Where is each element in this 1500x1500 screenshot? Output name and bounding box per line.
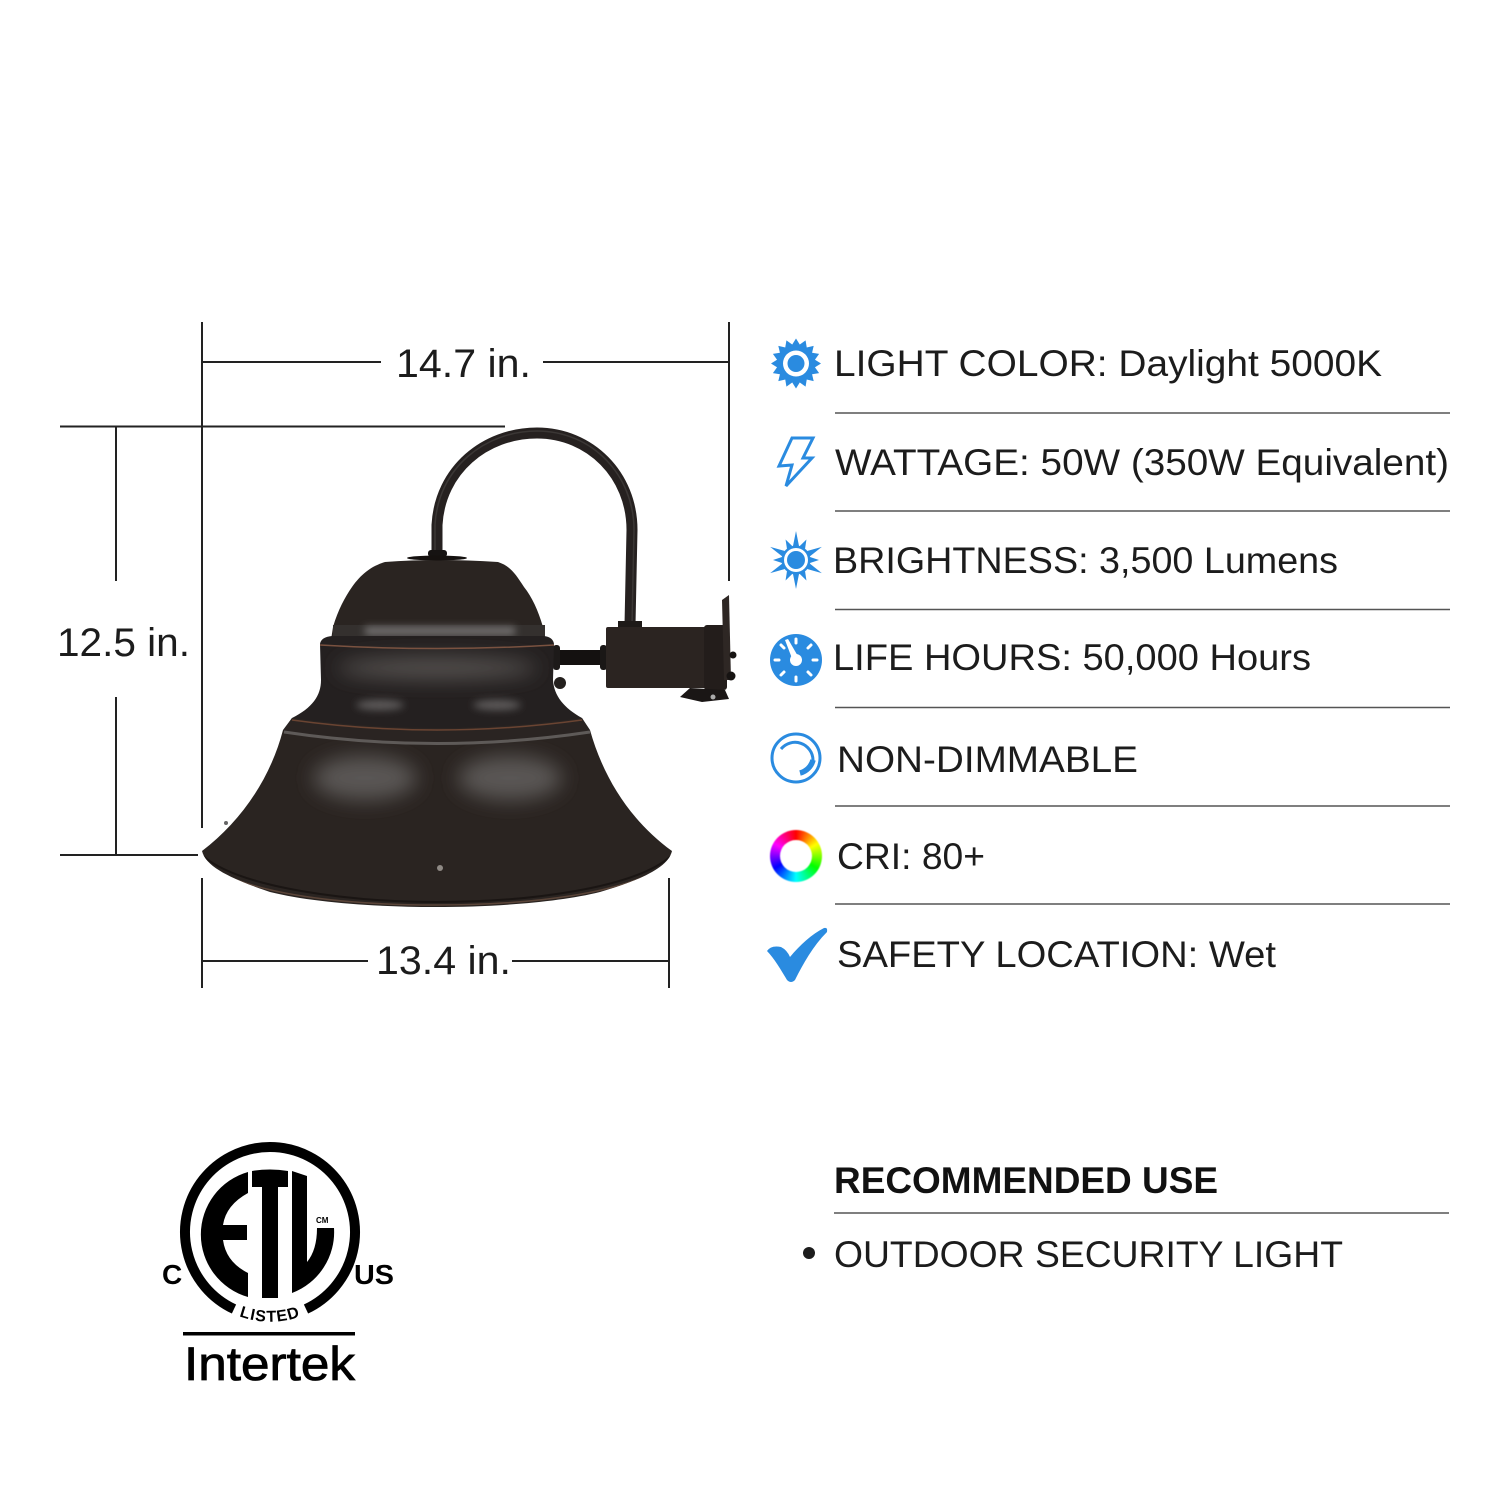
spec: wattage: WATTAGE: 50W (350W Equivalent) bbox=[835, 442, 1449, 483]
letter T bbox=[252, 1170, 288, 1298]
spec: brightness: BRIGHTNESS: 3,500 Lumens bbox=[833, 540, 1338, 581]
logo: ETL listed Intertek bbox=[162, 1142, 394, 1390]
dome bbox=[331, 560, 545, 640]
dividers bbox=[834, 413, 1450, 1213]
dimension lines bbox=[60, 322, 729, 988]
spec: life hours: LIFE HOURS: 50,000 Hours bbox=[833, 637, 1311, 678]
dimension label: height: 12.5 in. bbox=[57, 621, 190, 665]
product: gooseneck outdoor light bbox=[195, 431, 736, 915]
icon: life hours dial bbox=[770, 634, 822, 686]
recommended use item: OUTDOOR SECURITY LIGHT bbox=[834, 1234, 1343, 1275]
icon: lightning bolt bbox=[779, 438, 813, 486]
shade band bbox=[283, 718, 590, 744]
bullet bbox=[803, 1247, 815, 1259]
spec: light color: LIGHT COLOR: Daylight 5000K bbox=[834, 343, 1382, 384]
icon: light color sun bbox=[771, 338, 821, 389]
spec: non-dimmable: NON-DIMMABLE bbox=[837, 739, 1138, 780]
LISTED arc text: LISTED bbox=[240, 1306, 298, 1322]
ring bbox=[185, 1147, 355, 1309]
spec: CRI: CRI: 80+ bbox=[837, 836, 985, 877]
collar bbox=[280, 634, 600, 734]
gooseneck arm bbox=[435, 431, 634, 625]
letter L bbox=[292, 1171, 334, 1293]
icon: non-dimmable bbox=[772, 734, 820, 782]
dimension label: shade width: 13.4 in. bbox=[376, 939, 511, 983]
rule bbox=[183, 1332, 355, 1336]
shade bbox=[202, 730, 672, 907]
spec: safety location: SAFETY LOCATION: Wet bbox=[837, 934, 1277, 975]
icon: brightness sun bbox=[769, 531, 823, 589]
dome rim highlight bbox=[333, 625, 545, 637]
US mark: US bbox=[354, 1259, 394, 1290]
heading: recommended use: RECOMMENDED USE bbox=[834, 1160, 1218, 1201]
CM mark: CM bbox=[316, 1216, 329, 1225]
icon: check mark bbox=[767, 928, 827, 982]
dimension label: overall width: 14.7 in. bbox=[396, 342, 531, 386]
letter E bbox=[201, 1172, 248, 1297]
wall mount bbox=[553, 595, 736, 702]
C mark: C bbox=[162, 1259, 182, 1290]
Intertek wordmark: Intertek bbox=[184, 1337, 356, 1390]
icon: CRI colour ring bbox=[770, 830, 822, 882]
